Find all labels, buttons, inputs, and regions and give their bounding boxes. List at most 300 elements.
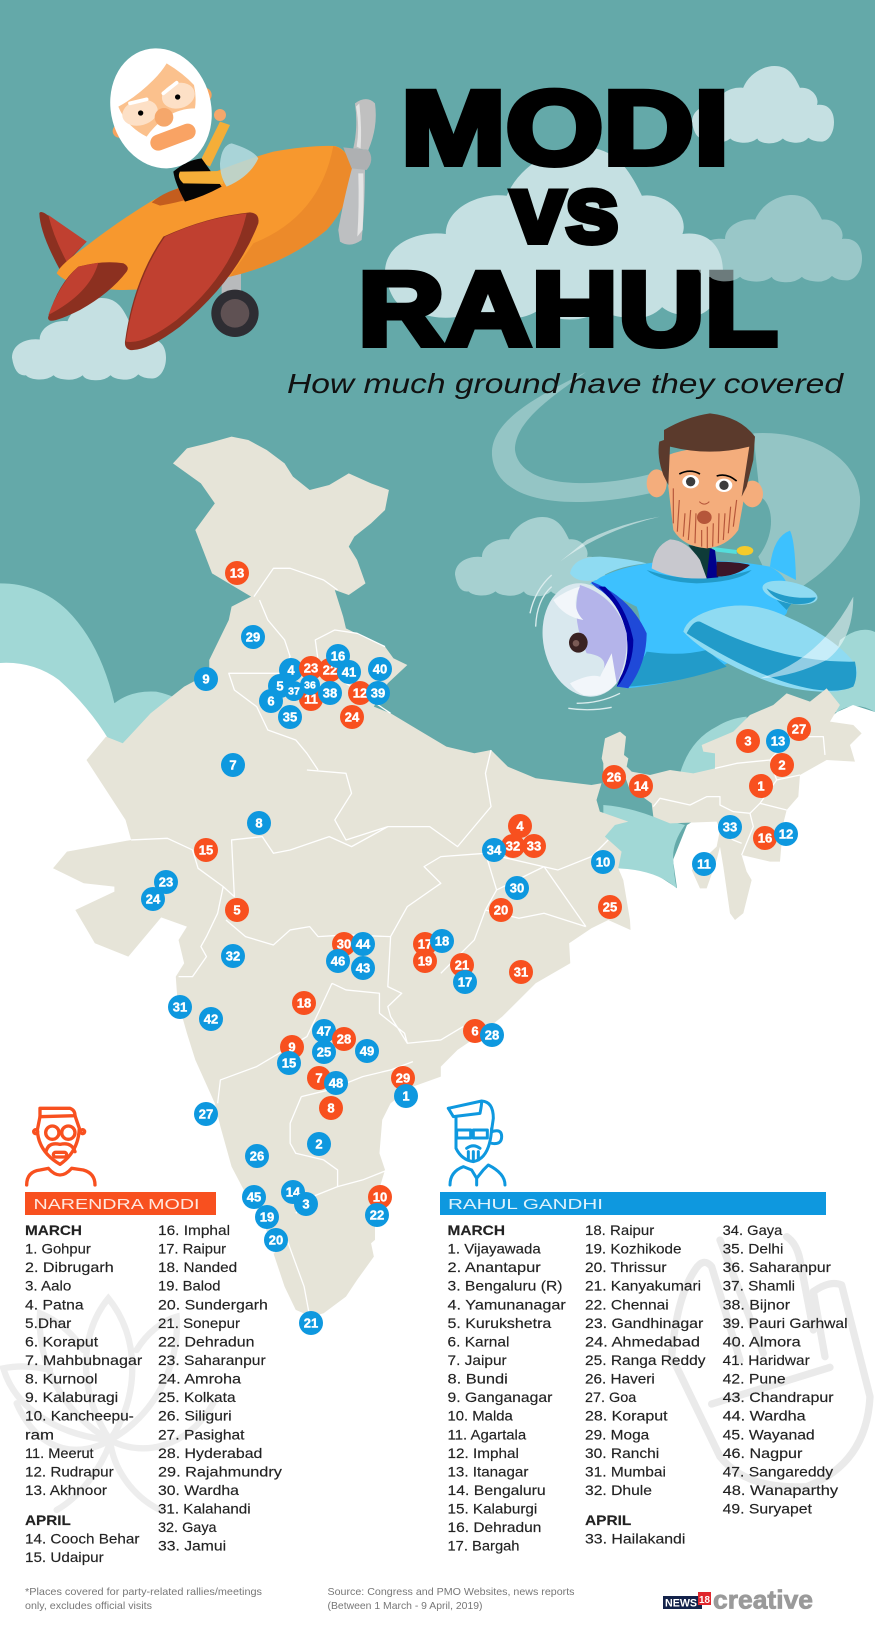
Rahul list column 1: 1. Vijayawada: [448, 1241, 541, 1257]
Modi list column 1: 1. Gohpur: [25, 1241, 91, 1257]
marker M3: 3: [744, 734, 752, 748]
Rahul list column 3: 48. Wanaparthy: [723, 1482, 838, 1498]
Rahul list column 3: 43. Chandrapur: [723, 1389, 834, 1405]
propeller: [338, 99, 376, 245]
Modi list column 2: 22. Dehradun: [158, 1333, 254, 1349]
Rahul list column 3: [723, 1222, 848, 1517]
Rahul list column 2: 28. Koraput: [585, 1408, 668, 1424]
fuselage: [570, 557, 789, 688]
marker M14: [629, 774, 653, 798]
marker M1: 1: [757, 778, 765, 794]
marker M31: [509, 960, 533, 984]
Modi list column 2: 16. Imphal: [158, 1222, 230, 1238]
illustration: Modi in orange plane: [39, 37, 376, 350]
source note: (Between 1 March - 9 April, 2019): [328, 1600, 482, 1612]
Rahul list column 2: 31. Mumbai: [585, 1463, 666, 1479]
banner: Narendra Modi: [25, 1192, 216, 1215]
Rahul list column 2: [585, 1222, 706, 1546]
logo: News18 Creative: NEWS: [665, 1598, 697, 1610]
icon: Rahul Gandhi line portrait: [448, 1101, 505, 1185]
Modi list column 2: 23. Saharanpur: [158, 1352, 266, 1368]
marker M16: [753, 826, 777, 850]
marker R12: [774, 822, 798, 846]
marker R7: [221, 753, 245, 777]
Rahul list column 3: 41. Haridwar: [723, 1352, 810, 1368]
Rahul list column 1: 7. Jaipur: [448, 1352, 507, 1368]
marker R3: [294, 1192, 318, 1216]
marker R36: 36: [304, 680, 316, 692]
marker R44: 44: [356, 936, 371, 952]
marker R8: 8: [255, 816, 263, 830]
Modi list column 1: 8. Kurnool: [25, 1371, 98, 1387]
Rahul list column 2: 26. Haveri: [585, 1371, 655, 1387]
Rahul list column 2: 19. Kozhikode: [585, 1241, 682, 1257]
marker M27: 27: [792, 722, 806, 736]
cowling ring: [592, 582, 647, 688]
marker R28: [480, 1023, 504, 1047]
marker R43: 43: [356, 960, 370, 976]
marker R14: [281, 1180, 305, 1204]
map of India: north-east: [602, 688, 862, 920]
marker R29: 29: [246, 630, 260, 644]
Modi list column 1: 14. Cooch Behar: [25, 1530, 140, 1546]
Rahul list column 3: 38. Bijnor: [723, 1296, 790, 1312]
marker M21: [450, 953, 474, 977]
Modi list column 2: 25. Kolkata: [158, 1389, 236, 1405]
marker M22: 22: [323, 662, 337, 678]
marker R1: 1: [402, 1088, 410, 1104]
marker R20: [264, 1228, 288, 1252]
marker R37: 37: [288, 686, 300, 698]
Modi list column 2: 20. Sundergarh: [158, 1296, 268, 1312]
Modi list column 2: 19. Balod: [158, 1278, 220, 1294]
Rahul list column 1: [448, 1222, 566, 1554]
marker R31: 31: [173, 1000, 187, 1014]
Rahul list column 1: 11. Agartala: [448, 1426, 526, 1442]
marker M4: 4: [516, 818, 524, 834]
illustration: Rahul in blue plane: [530, 413, 857, 710]
marker R12: 12: [779, 826, 793, 842]
Rahul list column 2: 25. Ranga Reddy: [585, 1352, 706, 1368]
map markers: Narendra Modi: [194, 561, 811, 1209]
Modi list column 2: 31. Kalahandi: [158, 1501, 251, 1517]
marker R30: 30: [510, 880, 524, 896]
background: white lower area: [0, 663, 875, 1641]
Rahul list column 3: 36. Saharanpur: [723, 1259, 831, 1275]
Rahul list column 2: 29. Moga: [585, 1426, 649, 1442]
marker R25: 25: [317, 1044, 331, 1060]
marker R16: 16: [331, 648, 345, 664]
marker M8: 8: [327, 1100, 335, 1116]
main wing: [683, 606, 857, 692]
marker M10: [368, 1185, 392, 1209]
marker R35: [278, 705, 302, 729]
Rahul list column 3: 42. Pune: [723, 1371, 786, 1387]
Rahul list column 2: 20. Thrissur: [585, 1259, 667, 1275]
Rahul list column 3: 35. Delhi: [723, 1241, 783, 1257]
Rahul list column 3: 34. Gaya: [723, 1222, 783, 1238]
marker R43: [351, 956, 375, 980]
banner: Rahul Gandhi: RAHUL GANDHI: [448, 1196, 603, 1213]
marker M25: [598, 895, 622, 919]
marker R32: [221, 944, 245, 968]
marker M20: 20: [494, 902, 508, 918]
source note: [328, 1586, 574, 1612]
Modi list column 1: APRIL: [25, 1512, 71, 1528]
marker R31: [168, 995, 192, 1019]
marker M18: 18: [297, 996, 311, 1010]
marker R41: 41: [342, 664, 356, 680]
marker R25: [312, 1040, 336, 1064]
marker R30: [505, 876, 529, 900]
marker R3: 3: [302, 1196, 310, 1212]
marker M30: 30: [337, 936, 351, 952]
tail fin: [39, 212, 87, 270]
Rahul list column 2: 27. Goa: [585, 1389, 637, 1405]
marker R17: 17: [458, 974, 472, 990]
marker R22: [365, 1203, 389, 1227]
marker R21: 21: [304, 1316, 318, 1330]
marker M21: 21: [455, 958, 469, 972]
banner: Narendra Modi: NARENDRA MODI: [34, 1196, 200, 1213]
marker R24: 24: [146, 892, 161, 906]
background: light teal areas east: [680, 630, 875, 780]
marker M33: 33: [527, 838, 541, 854]
Modi list column 1: 11. Meerut: [25, 1445, 94, 1461]
Modi list column 2: 24. Amroha: [158, 1371, 241, 1387]
marker M33: [522, 834, 546, 858]
marker M11: [299, 687, 323, 711]
canopy: [220, 143, 258, 187]
cloud: right, translucent over title: [695, 195, 862, 282]
Rahul list column 2: 30. Ranchi: [585, 1445, 659, 1461]
Rahul list column 2: 33. Hailakandi: [585, 1530, 685, 1546]
marker M29: [391, 1066, 415, 1090]
marker R17: [453, 970, 477, 994]
Modi list column 1: 12. Rudrapur: [25, 1463, 114, 1479]
marker R38: [318, 681, 342, 705]
Modi list column 1: [25, 1222, 143, 1565]
marker M7: [307, 1066, 331, 1090]
marker R13: 13: [771, 734, 785, 748]
marker R21: [299, 1311, 323, 1335]
title: MODI: [401, 70, 729, 187]
marker R42: 42: [204, 1012, 218, 1026]
subtitle: How much ground have they covered: [287, 368, 845, 399]
marker R33: [718, 815, 742, 839]
marker M28: 28: [337, 1032, 351, 1046]
Modi list column 2: 27. Pasighat: [158, 1426, 245, 1442]
marker R29: [241, 625, 265, 649]
footnote: only, excludes official visits: [25, 1600, 152, 1612]
state borders NE: [653, 737, 825, 855]
Rahul list column 1: 2. Anantapur: [448, 1259, 541, 1275]
Modi list column 2: 28. Hyderabad: [158, 1445, 262, 1461]
marker R10: [591, 850, 615, 874]
watermark: hand: [672, 1237, 870, 1487]
Modi list column 2: 18. Nanded: [158, 1259, 237, 1275]
marker R11: [692, 852, 716, 876]
Modi list column 1: 3. Aalo: [25, 1278, 72, 1294]
marker M24: [340, 705, 364, 729]
motion lines: [530, 575, 620, 710]
Rahul list column 2: 21. Kanyakumari: [585, 1278, 701, 1294]
marker R15: [277, 1051, 301, 1075]
marker R22: 22: [370, 1208, 384, 1222]
marker R9: 9: [202, 672, 210, 686]
marker M6: [463, 1019, 487, 1043]
map markers: Rahul Gandhi: [141, 625, 798, 1335]
marker R4: 4: [287, 662, 295, 678]
marker M31: 31: [514, 964, 528, 980]
Modi list column 2: 32. Gaya: [158, 1519, 217, 1535]
logo: News18 Creative: [663, 1584, 813, 1614]
tail fin: [770, 531, 796, 580]
marker M19: 19: [418, 954, 432, 968]
Modi list column 2: [158, 1222, 282, 1554]
marker R47: [312, 1019, 336, 1043]
map of India: mainland: [53, 437, 631, 1317]
marker M13: 13: [230, 566, 244, 580]
marker M2: 2: [778, 758, 786, 772]
marker R19: 19: [260, 1210, 274, 1224]
marker M5: 5: [233, 902, 241, 918]
Rahul list column 2: APRIL: [585, 1512, 632, 1528]
landing gear: [211, 273, 259, 337]
state borders: [131, 568, 608, 1317]
Rahul list column 3: 39. Pauri Garhwal: [723, 1315, 848, 1331]
marker R20: 20: [269, 1232, 283, 1248]
marker M23: [299, 656, 323, 680]
cloud: top right: [692, 66, 834, 143]
Rahul list column 3: 44. Wardha: [723, 1408, 806, 1424]
Rahul body and canopy: [647, 539, 753, 583]
marker M17: 17: [418, 936, 432, 952]
Rahul list column 2: 24. Ahmedabad: [585, 1333, 700, 1349]
Rahul list column 1: 3. Bengaluru (R): [448, 1278, 562, 1294]
marker R33: 33: [723, 820, 737, 834]
marker R36: [300, 675, 320, 695]
marker R27: [194, 1102, 218, 1126]
marker R24: [141, 887, 165, 911]
Rahul list column 1: 12. Imphal: [448, 1445, 519, 1461]
watermark: lotus: [3, 1298, 213, 1510]
marker R26: 26: [250, 1148, 264, 1164]
Modi list column 2: 21. Sonepur: [158, 1315, 240, 1331]
marker M15: 15: [199, 842, 213, 858]
marker R39: [366, 681, 390, 705]
marker M11: 11: [304, 692, 318, 706]
marker R14: 14: [286, 1184, 301, 1200]
marker R4: [279, 658, 303, 682]
marker R37: [284, 681, 304, 701]
marker M16: 16: [758, 830, 772, 846]
marker R1: [394, 1084, 418, 1108]
Rahul list column 2: 32. Dhule: [585, 1482, 652, 1498]
marker R28: 28: [485, 1028, 499, 1042]
Modi list column 2: 17. Raipur: [158, 1241, 226, 1257]
title: RAHUL: [358, 251, 778, 368]
marker R5: [268, 674, 292, 698]
marker M5: [225, 898, 249, 922]
marker R23: 23: [159, 874, 173, 890]
marker R46: [326, 949, 350, 973]
icon: Narendra Modi line portrait: [27, 1108, 95, 1185]
marker M32: 32: [506, 838, 520, 854]
marker M24: 24: [345, 710, 360, 724]
marker R49: 49: [360, 1044, 374, 1058]
Modi list column 1: MARCH: [25, 1222, 82, 1238]
swirl trail behind Rahul plane: [492, 372, 860, 603]
marker R16: [326, 644, 350, 668]
marker R38: 38: [323, 686, 337, 700]
marker R19: [255, 1205, 279, 1229]
front wing: [125, 212, 259, 350]
marker M15: [194, 838, 218, 862]
marker R39: 39: [371, 686, 385, 700]
Modi list column 1: 13. Akhnoor: [25, 1482, 107, 1498]
Rahul list column 1: 6. Karnal: [448, 1333, 509, 1349]
Modi list column 2: 33. Jamui: [158, 1538, 226, 1554]
marker M9: [280, 1035, 304, 1059]
Modi head: [97, 37, 225, 180]
marker R13: [766, 729, 790, 753]
map markers: Rahul, lower layer: [268, 658, 790, 1043]
Modi list column 1: 4. Patna: [25, 1296, 84, 1312]
banner: Rahul Gandhi: [440, 1192, 826, 1215]
marker M28: [332, 1027, 356, 1051]
Rahul list column 3: 45. Wayanad: [723, 1426, 815, 1442]
marker R44: [351, 932, 375, 956]
marker R46: 46: [331, 954, 345, 968]
Modi list column 1: ram: [25, 1426, 54, 1442]
Rahul list column 1: 16. Dehradun: [448, 1519, 541, 1535]
footnote: [25, 1586, 262, 1612]
marker M20: [489, 898, 513, 922]
marker R6: 6: [267, 694, 275, 708]
Rahul list column 3: 40. Almora: [723, 1333, 801, 1349]
Rahul list column 1: 5. Kurukshetra: [448, 1315, 552, 1331]
Rahul head: [647, 413, 763, 548]
background: light teal Bay of Bengal wedge: [603, 805, 685, 888]
Modi list column 1: 10. Kancheepu-: [25, 1408, 134, 1424]
marker M12: 12: [353, 686, 367, 700]
marker M26: 26: [607, 770, 621, 784]
marker R7: 7: [229, 758, 237, 772]
Modi list column 1: 15. Udaipur: [25, 1549, 104, 1565]
Rahul list column 1: 15. Kalaburgi: [448, 1501, 537, 1517]
marker R48: 48: [329, 1076, 343, 1090]
Rahul list column 1: 4. Yamunanagar: [448, 1296, 566, 1312]
marker R40: 40: [373, 662, 387, 676]
Modi list column 1: 9. Kalaburagi: [25, 1389, 118, 1405]
Modi list column 2: 26. Siliguri: [158, 1408, 232, 1424]
marker R41: [337, 660, 361, 684]
cloud: below Modi plane: [12, 298, 166, 380]
tail wing: [760, 576, 820, 610]
marker M23: 23: [304, 660, 318, 676]
pilot body: [173, 109, 230, 202]
marker M6: 6: [471, 1024, 479, 1038]
Modi list column 1: 7. Mahbubnagar: [25, 1352, 143, 1368]
marker R23: [154, 870, 178, 894]
marker R18: 18: [435, 934, 449, 948]
marker R35: 35: [283, 710, 297, 724]
cloud: large centre: [385, 147, 723, 319]
logo: News18 Creative: 18: [699, 1594, 710, 1606]
marker M25: 25: [603, 900, 617, 914]
marker R2: [307, 1132, 331, 1156]
marker R49: [355, 1039, 379, 1063]
marker M27: [787, 717, 811, 741]
marker M9: 9: [288, 1040, 296, 1054]
Rahul list column 1: 13. Itanagar: [448, 1463, 529, 1479]
marker R6: [259, 689, 283, 713]
marker R40: [368, 657, 392, 681]
title: vs: [511, 156, 619, 263]
Rahul list column 1: 10. Malda: [448, 1408, 513, 1424]
marker M30: [332, 932, 356, 956]
marker R47: 47: [317, 1024, 331, 1038]
marker R48: [324, 1071, 348, 1095]
Rahul list column 3: 46. Nagpur: [723, 1445, 803, 1461]
source note: Source: Congress and PMO Websites, news reports: [328, 1586, 574, 1598]
Rahul list column 1: 17. Bargah: [448, 1538, 520, 1554]
marker M14: 14: [634, 778, 649, 794]
footnote: *Places covered for party-related rallies/meetings: [25, 1586, 262, 1598]
rear wing: [48, 262, 128, 321]
Modi list column 1: 2. Dibrugarh: [25, 1259, 114, 1275]
marker R15: 15: [282, 1056, 296, 1070]
marker R8: [247, 811, 271, 835]
marker R9: [194, 667, 218, 691]
marker R26: [245, 1144, 269, 1168]
marker M1: [749, 774, 773, 798]
marker M8: [319, 1096, 343, 1120]
marker M4: [508, 814, 532, 838]
title: [358, 70, 778, 368]
Rahul list column 2: 22. Chennai: [585, 1296, 669, 1312]
marker M19: [413, 949, 437, 973]
marker R45: [242, 1185, 266, 1209]
marker R2: 2: [315, 1136, 323, 1152]
marker R5: 5: [276, 678, 284, 694]
marker R27: 27: [199, 1106, 213, 1122]
Rahul list column 3: 47. Sangareddy: [723, 1463, 833, 1479]
marker R45: 45: [247, 1190, 261, 1204]
Modi list column 1: 5.Dhar: [25, 1315, 72, 1331]
marker M7: 7: [315, 1070, 323, 1086]
marker R34: [482, 838, 506, 862]
marker R11: 11: [697, 856, 711, 872]
Rahul list column 1: 14. Bengaluru: [448, 1482, 546, 1498]
cloud behind Rahul plane: [455, 517, 605, 596]
marker M22: [318, 658, 342, 682]
marker M2: [770, 753, 794, 777]
Rahul list column 1: 8. Bundi: [448, 1371, 508, 1387]
marker M26: [602, 765, 626, 789]
Modi list column 2: 29. Rajahmundry: [158, 1463, 282, 1479]
Rahul list column 1: 9. Ganganagar: [448, 1389, 553, 1405]
Modi list column 1: 6. Koraput: [25, 1333, 98, 1349]
fuselage: [57, 146, 353, 290]
marker R10: 10: [596, 854, 610, 870]
marker M3: [736, 729, 760, 753]
spinning propeller disc: [532, 575, 638, 705]
marker M10: 10: [373, 1190, 387, 1204]
marker R34: 34: [487, 842, 502, 858]
marker R42: [199, 1007, 223, 1031]
